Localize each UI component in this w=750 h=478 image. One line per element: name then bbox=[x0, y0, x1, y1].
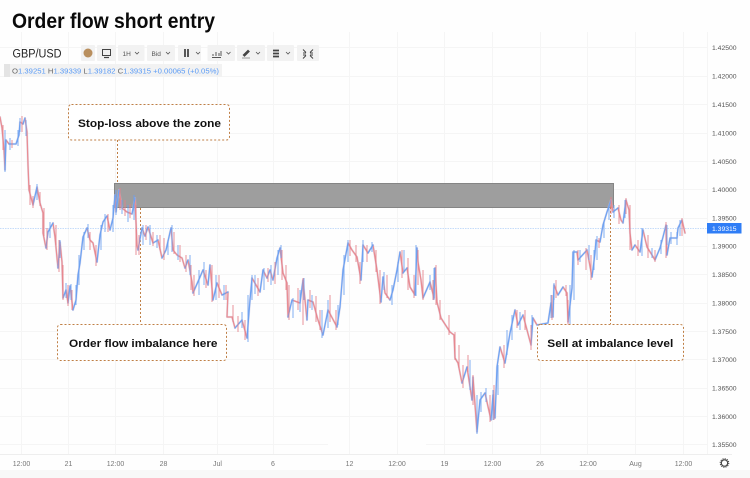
time axis: 21 bbox=[65, 461, 72, 468]
price axis: 1.37500 bbox=[712, 329, 737, 336]
price axis: 1.39000 bbox=[712, 244, 737, 250]
time axis: 26 bbox=[536, 461, 544, 468]
symbol name: GBP/USD bbox=[12, 48, 62, 60]
OHLC readout bbox=[4, 64, 222, 77]
callout: order flow imbalance: Order flow imbalance here bbox=[69, 338, 218, 350]
time axis bbox=[13, 461, 692, 468]
OHLC readout: O1.39251 H1.39339 L1.39182 C1.39315 +0.00065 (+0.05%) bbox=[12, 68, 219, 76]
time axis: 19 bbox=[441, 461, 448, 468]
toolbar buttons: Bid bbox=[152, 51, 161, 58]
price axis: 1.40000 bbox=[712, 187, 737, 194]
title: Order flow short entry bbox=[12, 10, 215, 33]
price axis: 1.36000 bbox=[712, 414, 737, 421]
toolbar buttons bbox=[81, 45, 319, 61]
time axis: 12:00 bbox=[107, 461, 124, 468]
price axis: 1.41500 bbox=[712, 102, 737, 109]
icon: settings gear bbox=[720, 459, 729, 467]
price chart bbox=[0, 116, 685, 434]
price axis: 1.41000 bbox=[712, 130, 737, 138]
callout: stop-loss bbox=[68, 104, 230, 140]
price axis: 1.40500 bbox=[712, 159, 737, 166]
time axis: 6 bbox=[271, 461, 275, 468]
callout: sell level bbox=[538, 324, 684, 360]
callout: order flow imbalance bbox=[58, 324, 226, 360]
connectors bbox=[118, 140, 610, 324]
price axis: 1.37000 bbox=[712, 357, 737, 364]
zone: order flow imbalance bbox=[114, 184, 614, 208]
current price label bbox=[707, 223, 742, 234]
time axis: 12:00 bbox=[484, 461, 501, 468]
callout: sell level: Sell at imbalance level bbox=[547, 338, 673, 350]
time axis: 12:00 bbox=[675, 461, 692, 468]
current price line bbox=[0, 228, 707, 230]
time axis: Aug bbox=[629, 461, 642, 468]
time axis: 12 bbox=[346, 461, 353, 468]
price axis: 1.38500 bbox=[712, 272, 737, 279]
price axis: 1.42500 bbox=[712, 45, 737, 52]
time axis: 12:00 bbox=[579, 461, 597, 468]
current price label: 1.39315 bbox=[712, 226, 737, 233]
price axis bbox=[707, 45, 742, 449]
price axis: 1.36500 bbox=[712, 386, 737, 392]
time axis: 12:00 bbox=[388, 461, 406, 468]
time axis: 28 bbox=[160, 461, 167, 468]
time axis: Jul bbox=[213, 461, 222, 468]
toolbar buttons: 1H bbox=[122, 51, 131, 58]
time axis: 12:00 bbox=[13, 461, 30, 468]
toolbar bbox=[4, 45, 319, 77]
price axis: 1.35500 bbox=[712, 442, 737, 449]
price axis: 1.38000 bbox=[712, 300, 737, 308]
callout: stop-loss: Stop-loss above the zone bbox=[78, 118, 221, 130]
price axis: 1.39500 bbox=[712, 216, 737, 222]
price axis: 1.42000 bbox=[712, 74, 737, 80]
